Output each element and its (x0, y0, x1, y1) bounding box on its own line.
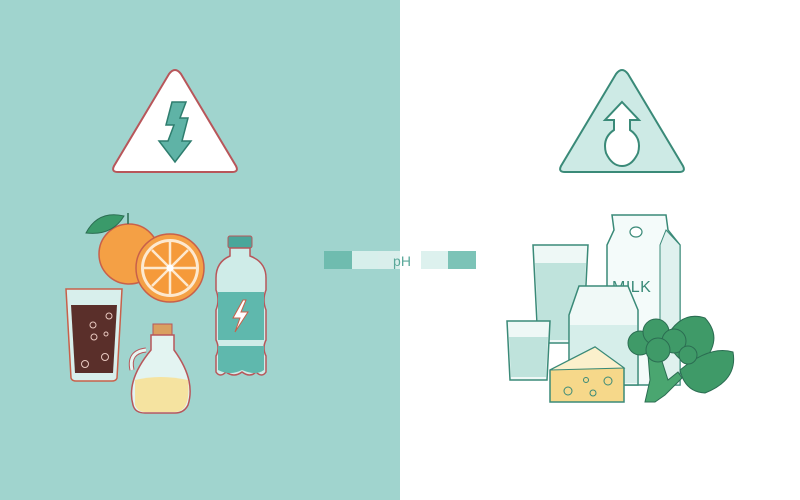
icon: milk carton (607, 215, 680, 385)
pH scale bar: pH (393, 253, 411, 269)
icon: broccoli (628, 319, 697, 402)
icon: oil jug (131, 324, 190, 413)
icon: cola glass (66, 289, 122, 381)
icon: whole orange (86, 213, 159, 284)
icon: small milk glass (507, 321, 550, 380)
icon: alkaline triangle (560, 70, 684, 172)
icon: small carton (569, 286, 638, 385)
icon: spinach leaves (665, 316, 734, 393)
icon: cheese wedge (550, 347, 624, 402)
icon: sports drink bottle (216, 236, 266, 375)
pH scale bar (324, 251, 476, 269)
icon: tall milk glass (533, 245, 588, 343)
panel: alkaline background (400, 0, 800, 500)
icon: orange half (136, 234, 204, 302)
icon: acid warning triangle (113, 70, 237, 172)
icon: milk carton: MILK (612, 279, 651, 296)
panel: acidic background (0, 0, 400, 500)
